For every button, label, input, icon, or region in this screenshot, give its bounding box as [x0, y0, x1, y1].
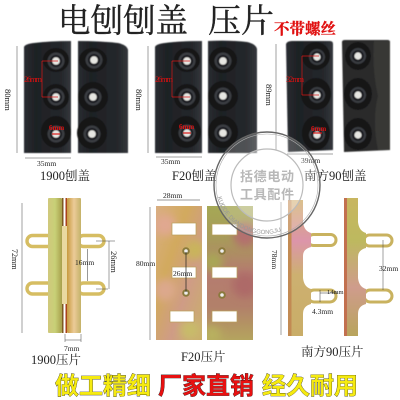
dimension: 80mm height — [3, 46, 17, 153]
panel: F20 pressing plate — [136, 191, 258, 364]
label: Nanfang 90 cover: 南方90刨盖 — [304, 168, 367, 183]
label: F20 plate: F20压片 — [181, 349, 225, 364]
dimension: 89mm height: 89mm — [264, 84, 274, 106]
title — [58, 3, 274, 40]
dimension: 26mm hole spacing: 26mm — [173, 269, 192, 278]
watermark stamp: KUODE DIANDONGGONGJU — [218, 196, 280, 234]
dimension: 78mm height: 78mm — [270, 250, 279, 269]
dimension: 78mm height — [270, 202, 281, 335]
dimension: 39mm width: 39mm — [301, 156, 320, 165]
callout: no screws: 不带螺丝 — [274, 19, 336, 38]
panel: Nanfang 90 pressing plate — [270, 198, 398, 359]
slogan: 经久耐用 — [262, 373, 358, 400]
watermark stamp: 工具配件 — [240, 187, 294, 202]
watermark stamp — [213, 131, 321, 239]
dimension: 32mm — [379, 240, 398, 290]
dimension: 80mm height: 80mm — [134, 89, 144, 111]
label: 1900 plate: 1900压片 — [31, 352, 81, 367]
panel: 1900 pressing plate — [10, 198, 119, 367]
title: 电刨刨盖 — [58, 3, 188, 40]
label: F20 cover: F20刨盖 — [172, 168, 216, 183]
dimension: 32mm spacing — [286, 56, 319, 95]
watermark stamp: 括德电动 — [240, 169, 294, 184]
dimension: 16mm — [75, 249, 94, 281]
dimension: 4.3mm: 4.3mm — [312, 307, 333, 316]
dimension: 26mm spacing: 26mm — [155, 74, 173, 84]
dimension: 28mm width: 28mm — [163, 191, 182, 200]
dimension: 6mm hole: 6mm — [311, 125, 326, 133]
dimension: 14mm: 14mm — [327, 289, 344, 296]
dimension: 7mm — [64, 334, 81, 353]
dimension: 35mm width — [156, 157, 202, 166]
dimension: 39mm width — [287, 154, 333, 165]
dimension: 26mm — [96, 241, 119, 289]
label: 1900 cover: 1900刨盖 — [40, 168, 90, 183]
dimension: 35mm width — [25, 158, 71, 168]
photo: Nanfang 90 plates — [288, 198, 392, 336]
slogan: 厂家直销 — [158, 373, 254, 400]
photo: 1900 plates — [27, 198, 104, 333]
photo: Nanfang 90 covers — [286, 40, 390, 152]
dimension: 35mm width: 35mm — [37, 159, 56, 168]
dimension: 26mm spacing — [155, 61, 190, 97]
dimension: 28mm width — [157, 191, 200, 200]
dimension: 16mm: 16mm — [75, 258, 94, 267]
dimension: 80mm height — [136, 207, 155, 340]
dimension: 26mm: 26mm — [109, 251, 119, 273]
dimension: 72mm height — [10, 203, 22, 333]
panel: 1900 plane cover — [3, 41, 128, 183]
dimension: 26mm spacing: 26mm — [24, 74, 42, 84]
dimension: 32mm spacing: 32mm — [286, 75, 305, 84]
dimension: 72mm height: 72mm — [10, 249, 19, 270]
slogan: 做工精细 — [55, 373, 151, 400]
dimension: 6mm hole: 6mm — [49, 124, 64, 132]
dimension: 26mm spacing — [24, 61, 58, 97]
dimension: 32mm: 32mm — [379, 264, 398, 273]
dimension: 80mm height: 80mm — [3, 89, 13, 111]
panel: F20 plane cover — [134, 41, 257, 183]
dimension: 7mm: 7mm — [64, 344, 80, 353]
panel: Nanfang 90 plane cover — [264, 40, 390, 183]
title: 压片 — [208, 3, 274, 40]
dimension: 89mm height — [264, 44, 276, 150]
dimension: 26mm hole spacing — [173, 252, 192, 292]
dimension: 4.3mm — [312, 290, 333, 316]
label: Nanfang 90 plate: 南方90压片 — [301, 344, 364, 359]
photo: 1900 covers — [24, 41, 128, 153]
dimension: 35mm width: 35mm — [161, 157, 180, 166]
photo: F20 plates — [154, 206, 258, 344]
dimension: 80mm height: 80mm — [136, 259, 155, 268]
dimension: 6mm hole: 6mm — [179, 123, 194, 131]
photo: F20 covers — [155, 41, 257, 153]
dimension: 80mm height — [134, 46, 148, 153]
slogan — [55, 373, 358, 400]
